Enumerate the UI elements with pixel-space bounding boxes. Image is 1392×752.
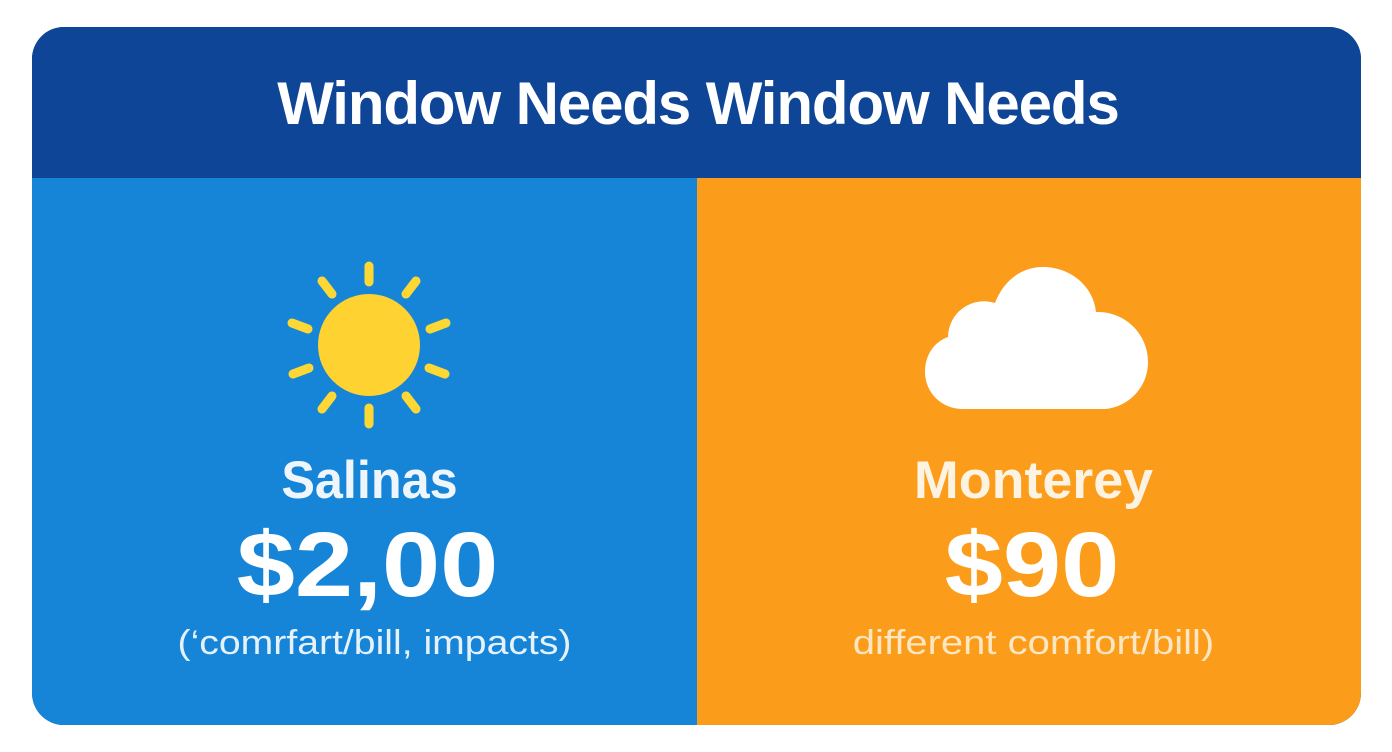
caption: different comfort/bill): [853, 624, 1214, 662]
city name: Monterey: [914, 451, 1153, 510]
icon: cloud: [925, 267, 1148, 409]
panel: Monterey: [697, 178, 1361, 725]
city name: Salinas: [281, 451, 458, 510]
price: $90: [945, 514, 1119, 616]
icon: sun: [288, 262, 450, 428]
header band: [32, 27, 1361, 178]
caption: (‘comrfart/bill, impacts): [178, 624, 571, 662]
price: $2,00: [237, 514, 498, 616]
panel: Salinas: [32, 178, 697, 725]
title: Window Needs Window Needs: [277, 70, 1119, 137]
